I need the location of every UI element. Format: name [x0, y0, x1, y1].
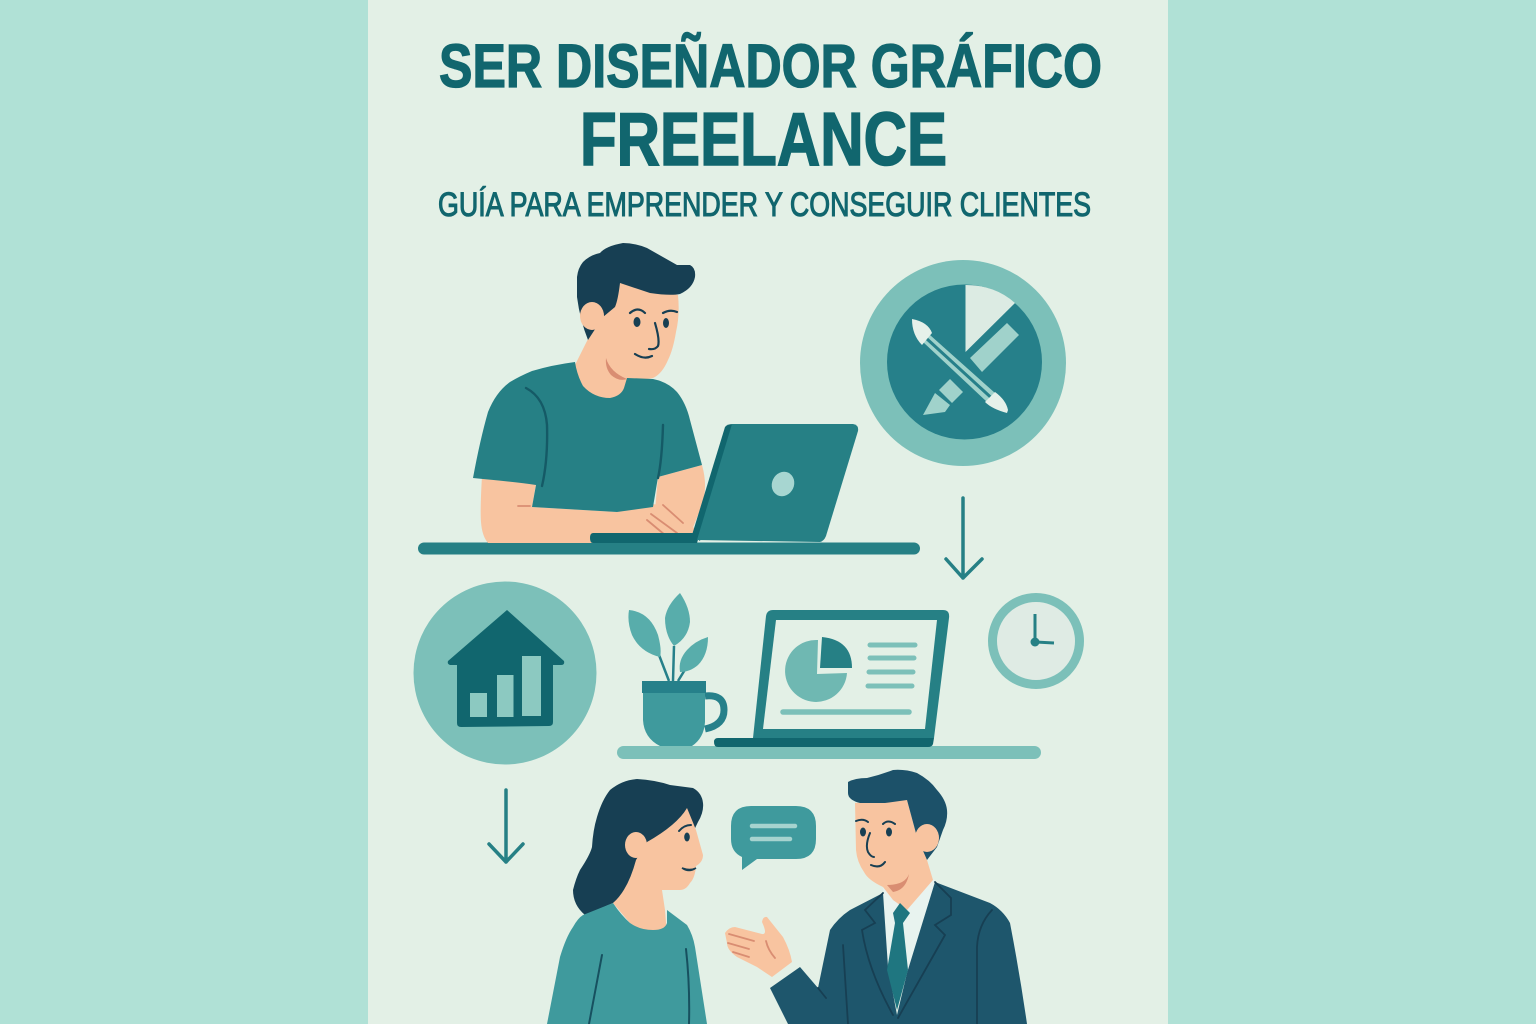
hand [725, 917, 792, 977]
shirt [883, 880, 935, 980]
hair [577, 243, 695, 340]
near arm and hand [481, 476, 697, 543]
arrow: down right [946, 498, 982, 578]
illustration: businessman [725, 770, 1027, 1024]
sweater seams [589, 949, 689, 1024]
palm lines [728, 934, 775, 958]
shirt seams [526, 388, 663, 486]
illustration: woman [547, 779, 707, 1024]
desk [418, 542, 920, 554]
illustration: man working at laptop [418, 243, 920, 554]
leaves [628, 610, 661, 657]
icon: clock [992, 598, 1080, 684]
laptop base [714, 738, 934, 747]
panel: central poster [368, 0, 1168, 1024]
illustration: plant in mug [628, 593, 724, 746]
chin shadow [606, 358, 627, 380]
bubble lines [752, 826, 795, 839]
heading line 1: SER DISEÑADOR GRÁFICO [439, 32, 1102, 100]
title [438, 32, 1102, 224]
heading line 2: FREELANCE [580, 97, 947, 181]
brush ferrule [939, 379, 963, 403]
tie [887, 903, 910, 1010]
neck and face [855, 800, 933, 910]
screen [763, 620, 937, 729]
neck and face [575, 283, 679, 405]
ear [915, 824, 939, 852]
face details [679, 825, 696, 870]
laptop lid [697, 424, 858, 542]
hair [848, 770, 947, 860]
icon: house with bar chart [414, 582, 596, 764]
laptop lid side [692, 424, 733, 541]
far arm [655, 465, 705, 535]
pie wedge [966, 285, 1015, 352]
laptop frame [753, 610, 949, 738]
stems [659, 646, 686, 681]
laptop logo [768, 468, 798, 500]
ear [580, 302, 604, 330]
subtitle: GUÍA PARA EMPRENDER Y CONSEGUIR CLIENTES [438, 186, 1091, 224]
chart lines [868, 645, 915, 686]
pencil [912, 319, 1008, 413]
face details [630, 310, 677, 358]
shelf [617, 746, 1041, 759]
brush tip [923, 393, 950, 415]
laptop base [590, 533, 700, 543]
neck shadow [887, 874, 909, 892]
hand lines [518, 505, 683, 535]
icon: speech bubble [731, 806, 816, 870]
ear [625, 832, 647, 858]
illustration: laptop with pie chart [714, 610, 949, 747]
suit [770, 882, 1027, 1024]
lapels and seams [818, 882, 992, 1024]
icon: pencil and brush circle [860, 260, 1066, 466]
face and neck [613, 808, 703, 935]
t-shirt [473, 362, 702, 512]
mug handle [705, 696, 724, 729]
mug rim [642, 681, 706, 693]
mug body [643, 692, 705, 746]
brush handle [970, 323, 1019, 372]
pie chart [785, 640, 847, 702]
face details [856, 820, 895, 866]
arrow: down left [489, 790, 523, 862]
sweater [547, 903, 707, 1024]
bars [470, 693, 487, 717]
hair [573, 779, 703, 915]
